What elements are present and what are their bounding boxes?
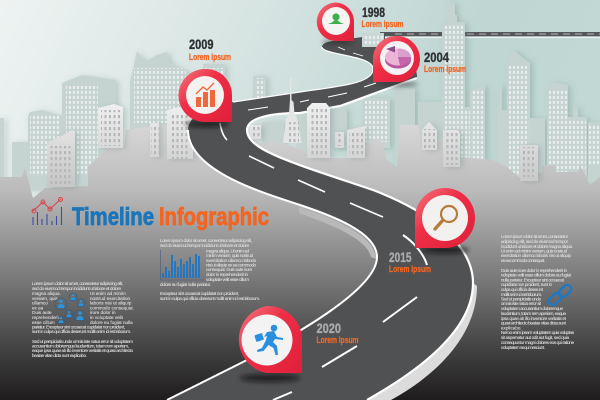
chart: bars [160,250,204,280]
pin 2015 [415,188,475,254]
text block: right: omnis iste natus error sit [501,301,542,306]
text block: middle: voluptate velit esse cillum [206,277,249,282]
text block: right: voluptate velit esse cillum dolore eu fugiat [501,272,572,278]
text block: middle: dolore eu fugiat nulla pariatur. [160,282,211,287]
text block: right: laudantium, totam rem aperiam, eaque [501,311,566,316]
text block: right: voluptatem sequi nesciunt. [501,345,545,350]
text block: middle: sunt in culpa qui officia deserunt mollit anim id est laborum. [160,296,260,301]
text block: middle: exercitation ullamco laboris [206,258,257,263]
year label 2004: 2004 [424,49,449,65]
year label 2009: 2009 [189,36,214,52]
text block: right [501,234,575,350]
text block: right: sit aspernatur aut odit aut fugit, sed quia [501,335,569,340]
text block: middle: Excepteur sint occaecat cupidatat non proident, [160,291,239,296]
window grids [30,24,600,176]
icon: growth chart [196,83,215,107]
text block: left: magna aliqua. [32,291,61,296]
text block: middle: nisi ut aliquip ex ea commodo [206,262,256,268]
road [167,34,477,400]
title [72,203,269,231]
text block: right: adipiscing elit, sed do eiusmod tempor [501,239,568,244]
text block: left: beatae vitae dicta sunt explicabo. [32,353,87,358]
text block: left: in voluptate velit [90,315,124,320]
text block: left: pariatur. Excepteur sint occaecat cupidatat non proident, [32,324,125,330]
text block: right: cupidatat non proident, sunt in [501,282,552,287]
text block: middle [160,238,260,301]
road surface [167,34,473,400]
text block: right: consequuntur magni dolores eos qui ratione [501,340,574,345]
road side extrusion [367,283,477,400]
text block: right: Lorem ipsum dolor sit amet, consectetur [501,234,568,239]
text block: right: voluptatem accusantium doloremque [501,306,563,311]
title: Infographic [159,203,269,231]
text block: left: Sed ut perspiciatis unde omnis iste natus error sit voluptatem [32,339,133,344]
text block: right: incididunt ut labore et dolore magna aliqua. [501,244,573,249]
pin 2004 [373,36,420,86]
text block: right: Duis aute irure dolor in reprehenderit in [501,268,567,273]
text block: left: irure dolor in [90,310,116,315]
text block: left: laboris nisi ut aliquip [90,300,132,306]
icon: chain link [547,283,573,307]
paper-cut city skyline: front layer [47,104,538,187]
text block: right: Ut enim ad minim veniam, quis nostrud [501,248,567,254]
text block: right: exercitation ullamco laboris nisi ut aliquip [501,253,571,258]
text block: left: sunt in culpa qui officia deserunt mollit anim id est laborum. [32,329,131,334]
text block: left: reprehenderit [32,315,60,320]
text block: left: esse cillum [32,320,55,325]
text block: left: ex ea [32,306,44,310]
text block: left: accusantium doloremque laudantium, totam rem aperiam, [32,344,129,348]
text block: left [32,281,134,358]
text block: middle: Lorem ipsum dolor sit amet, consectetur adipiscing elit, [160,238,252,243]
year label 2015 [389,249,431,274]
text block: left: nostrud exercitation [90,296,131,301]
text block: middle: magna aliqua. Ut enim ad [206,248,249,254]
road edge lines [167,47,473,400]
year label 2009 [189,36,231,62]
icon: title chart [32,198,62,225]
ground gradient [0,122,600,400]
paper-cut city skyline: back layer [0,1,600,190]
year label 2015: 2015 [389,249,412,265]
text block: left: commodo consequat. [90,306,134,310]
text block: left: sed do eiusmod tempor incididunt ut labore et dolore [32,286,121,291]
text block: right: mollit anim id est laborum. [501,292,542,297]
year label 2004: Lorem ipsum [424,64,466,74]
distant road strip [380,32,600,38]
year label 1998: Lorem ipsum [362,19,404,29]
text block: left: veniam, quis [32,296,58,301]
text block: left: ullamco [32,300,48,306]
text block: right: Sed ut perspiciatis unde [501,296,541,302]
year label 2020 [316,320,359,345]
text block: right: ex ea commodo consequat. [501,258,545,263]
year label 2020: 2020 [316,320,341,336]
pin 1998 [317,2,354,44]
text block: right: nulla pariatur. Excepteur sint occaecat [501,278,565,282]
icon: running man [254,325,283,355]
lane dashes [220,47,427,400]
year label 1998: 1998 [362,4,385,20]
year label 2020: Lorem ipsum [316,335,359,345]
pin 2009 [179,69,232,127]
text block: right: explicabo. [501,326,522,330]
text block: middle: sed do eiusmod tempor incididunt ut labore et dolore [160,243,249,248]
year label 2009: Lorem ipsum [189,52,231,62]
icon: person [328,13,344,24]
text block: left: Lorem ipsum dolor sit amet, consectetur adipiscing elit, [32,281,123,286]
year label 2015: Lorem ipsum [389,264,431,274]
text block: middle: dolor in reprehenderit in [206,272,248,277]
road inner shadow band [299,207,376,259]
icon: pie chart [385,46,411,68]
icon: people network [55,293,86,324]
text block: left: dolore eu fugiat nulla [90,320,133,325]
year label 2004 [424,49,466,74]
text block: left: eaque ipsa quae ab illo inventore veritatis et quasi architecto [32,348,133,353]
pin 2020 [239,306,302,382]
icon: magnifier [435,206,457,229]
year label 1998 [362,4,404,29]
text block: middle: minim veniam, quis nostrud [206,253,253,258]
text block: right: quasi architecto beatae vitae dicta sunt [501,320,567,326]
buildings overlapping the road [283,33,384,158]
text block: middle: consequat. Duis aute irure [206,267,252,272]
text block: right: culpa qui officia deserunt [501,287,544,292]
text block: left: Duis aute [32,310,52,315]
text block: right: Nemo enim ipsam voluptatem quia voluptas [501,330,575,335]
title: Timeline [72,203,154,231]
text block: right: ipsa quae ab illo inventore veritatis et [501,316,567,321]
text block: left: Ut enim ad minim [90,291,126,296]
